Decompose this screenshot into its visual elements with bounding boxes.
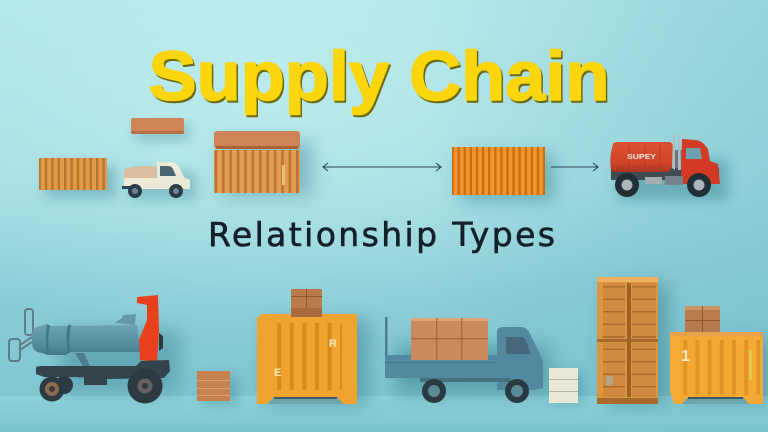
subtitle: Relationship Types	[208, 215, 555, 254]
icon: box on right container	[685, 306, 720, 336]
icon: small ribbed container	[39, 158, 116, 198]
icon: white delivery truck	[122, 162, 196, 200]
icon: blue tanker trailer with red mast	[9, 295, 180, 404]
icon: small brick stack	[197, 371, 238, 404]
icon: orange container with box on top: R	[329, 338, 337, 350]
arrow: double-headed	[323, 163, 441, 171]
icon: red tanker truck	[610, 132, 728, 200]
icon: orange container	[452, 147, 554, 201]
icon: orange container numbered 1	[670, 332, 768, 404]
icon: large container with lid	[214, 131, 312, 196]
icon: orange container with box on top	[257, 289, 368, 404]
icon: red tanker truck: SUPEY	[627, 152, 656, 161]
icon: floating brick	[131, 118, 190, 140]
icon: orange container with box on top: E	[274, 367, 281, 379]
title: Supply Chain	[150, 39, 611, 117]
icon: tall double-stacked container	[597, 277, 668, 405]
icon: box on container	[291, 289, 322, 317]
icon: blue flatbed truck with boxes	[385, 317, 550, 403]
icon: white box stack	[549, 368, 583, 404]
icon: orange container numbered 1: 1	[681, 348, 690, 365]
title: Supply Chain	[148, 37, 610, 115]
arrow: to tanker truck	[551, 163, 598, 171]
